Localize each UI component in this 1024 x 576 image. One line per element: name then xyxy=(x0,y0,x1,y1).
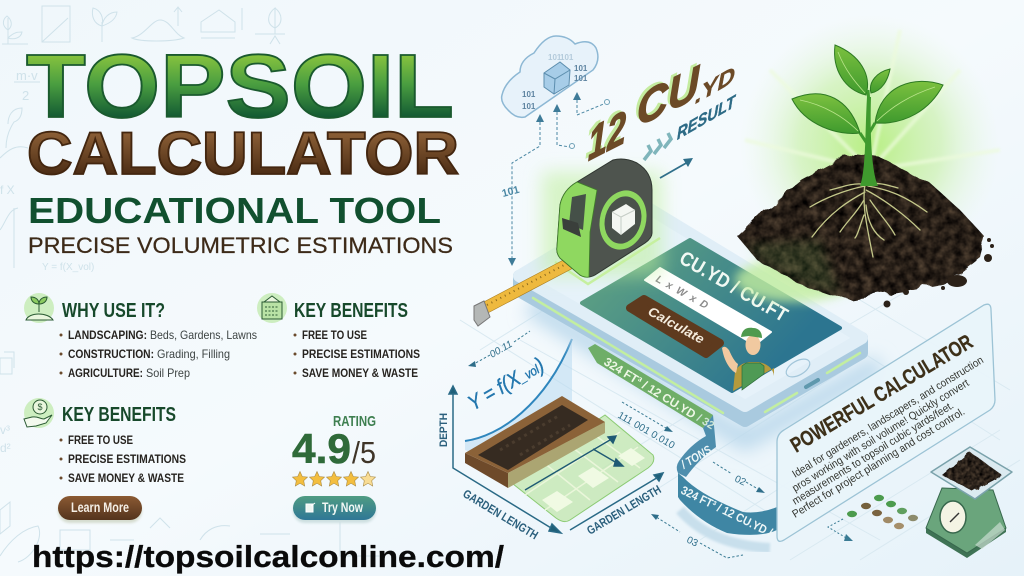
result unit: .YD xyxy=(695,61,735,110)
ribbon text faded: / 32 xyxy=(694,412,716,432)
binary digits xyxy=(522,53,588,111)
glow outline on phone xyxy=(555,238,660,284)
binary dashed annotations: 00.11 xyxy=(488,339,515,361)
background sketches: faint formulas and plants: f X xyxy=(0,183,15,197)
calculate button xyxy=(630,299,720,354)
list: PRECISE ESTIMATIONS xyxy=(68,452,186,466)
input field xyxy=(645,268,771,345)
dashed connectors from tape to cloud xyxy=(508,92,606,266)
binary dashed annotations: 02 xyxy=(733,474,748,489)
button: try now xyxy=(293,496,376,523)
connector end circles xyxy=(570,100,610,148)
formula: Y = f(X_vol) xyxy=(464,353,548,415)
rating block xyxy=(292,413,376,486)
list: Beds, Gardens, Lawns xyxy=(150,328,257,342)
button: try now: Try Now xyxy=(322,500,363,515)
isometric ground grid xyxy=(460,260,1020,560)
result readout xyxy=(585,53,736,178)
list: CONSTRUCTION: xyxy=(68,347,154,361)
list: Soil Prep xyxy=(146,366,190,380)
background sketches: faint formulas and plants xyxy=(0,6,380,562)
phone top face xyxy=(519,203,862,406)
title: TOPSOIL: TOPSOIL xyxy=(26,37,454,137)
binary dashed annotations xyxy=(472,331,763,558)
title: CALCULATOR: CALCULATOR xyxy=(27,120,459,187)
rating denominator: /5 xyxy=(352,435,376,470)
soil plant xyxy=(735,15,1000,308)
icon: hand with coin xyxy=(24,398,54,428)
phone body edge xyxy=(519,276,862,421)
soil crumbs xyxy=(884,238,994,308)
binary digits: 101 xyxy=(560,53,574,62)
phone shadow xyxy=(530,305,880,440)
depth label: DEPTH xyxy=(438,413,450,447)
result label: RESULT xyxy=(677,90,736,144)
measuring tape xyxy=(474,159,662,326)
list: FREE TO USE xyxy=(302,328,367,342)
ribbon: blue lower xyxy=(678,473,777,535)
cloud shape xyxy=(502,36,598,117)
ribbon text lower: 324 FT³ / 12 CU.YD / xyxy=(679,483,775,540)
background sketches: faint formulas and plants: 2 xyxy=(22,88,29,103)
axis arrow: garden length xyxy=(570,473,663,530)
ribbon text upper: 324 FT³ / 12 CU.YD xyxy=(601,355,699,422)
list: SAVE MONEY & WASTE xyxy=(68,471,184,485)
result number shadow: 12 xyxy=(585,99,623,169)
leaf: right xyxy=(875,81,943,123)
tagline: PRECISE VOLUMETRIC ESTIMATIONS xyxy=(28,233,453,258)
background sketches: faint formulas and plants: v³ xyxy=(0,423,10,437)
green grid plot xyxy=(508,415,654,522)
icon: sprout on soil xyxy=(24,293,54,323)
binary digits: 101 xyxy=(548,53,562,62)
worker xyxy=(722,328,774,391)
binary digits: 101 xyxy=(522,102,536,111)
panel body text: measurements to topsoil cubic yards/feet. xyxy=(790,400,956,508)
ribbon: results band xyxy=(588,344,777,548)
heading: WHY USE IT? xyxy=(62,300,165,322)
connector arrowheads xyxy=(508,92,581,266)
ribbon: green band xyxy=(588,344,713,428)
phone details: glow strips and home button xyxy=(533,298,860,413)
calculate button: Calculate xyxy=(646,304,707,347)
phone screen xyxy=(582,240,840,391)
branches xyxy=(860,90,875,145)
background sketches: faint formulas and plants: Y = f(X_vol) xyxy=(42,262,94,273)
screen heading: CU.YD / CU.FT xyxy=(676,247,791,327)
panel body text: Ideal for gardeners, landscapers, and construction xyxy=(790,354,986,481)
section: key benefits left xyxy=(24,398,186,485)
rating label: RATING xyxy=(333,413,376,430)
chevrons xyxy=(644,133,671,160)
chart: garden volume diagram xyxy=(438,339,664,542)
arrow xyxy=(660,158,693,178)
list: Grading, Filling xyxy=(157,347,230,361)
binary digits: 101 xyxy=(574,64,588,73)
title block xyxy=(26,37,459,258)
curve with shaded region xyxy=(465,339,572,470)
section: why use it xyxy=(24,293,257,380)
dots and scale group xyxy=(828,447,1012,558)
binary digits: 101 xyxy=(574,74,588,83)
label: garden length right: GARDEN LENGTH xyxy=(584,482,664,538)
icon: calculator xyxy=(257,293,287,323)
list: AGRICULTURE: xyxy=(68,366,143,380)
list xyxy=(294,328,420,380)
result CU: CU xyxy=(637,55,701,137)
icon: hand with coin: $ xyxy=(38,402,43,412)
soil mound xyxy=(738,152,985,300)
leaf: top xyxy=(835,45,868,95)
glow xyxy=(740,15,1000,275)
tape dial with cube xyxy=(593,185,653,255)
input field: L x W x D xyxy=(654,273,710,312)
list xyxy=(60,328,257,380)
section: key benefits right xyxy=(257,293,420,380)
panel body text: pros working with soil volume! Quickly convert xyxy=(790,377,971,495)
panel heading: POWERFUL CALCULATOR xyxy=(787,330,977,457)
result CU shadow: CU xyxy=(634,53,698,135)
raised garden bed xyxy=(465,396,605,488)
scale xyxy=(926,447,1012,558)
list xyxy=(60,433,186,485)
cube xyxy=(544,62,570,94)
list: LANDSCAPING: xyxy=(68,328,147,342)
leaf: small xyxy=(870,69,890,93)
heading: KEY BENEFITS xyxy=(294,300,408,322)
leaf: left xyxy=(792,94,860,133)
website url: https://topsoilcalconline.com/ xyxy=(32,539,504,574)
roots xyxy=(810,183,927,257)
list: SAVE MONEY & WASTE xyxy=(302,366,418,380)
phone calculator xyxy=(519,203,880,440)
tape blade xyxy=(478,256,577,315)
panel: powerful calculator xyxy=(777,304,995,541)
ribbon shadow xyxy=(680,510,770,548)
tape ticks xyxy=(487,262,570,305)
result number: 12 xyxy=(588,101,626,171)
depth axis xyxy=(449,386,561,533)
subtitle: educational tool: EDUCATIONAL TOOL xyxy=(28,190,441,231)
binary dashed annotations: 03 xyxy=(685,535,700,550)
dots xyxy=(847,495,918,529)
button: learn more xyxy=(58,496,142,523)
ribbon text tons: / TONS xyxy=(678,443,714,472)
list: PRECISE ESTIMATIONS xyxy=(302,347,420,361)
heading: KEY BENEFITS xyxy=(62,404,176,426)
stem xyxy=(860,97,878,186)
small annotation arrowheads xyxy=(468,361,765,520)
button: learn more: Learn More xyxy=(71,500,129,515)
leaf veins xyxy=(800,52,935,131)
binary dashed annotations: 111 001 0.010 xyxy=(616,410,677,452)
background sketches: faint formulas and plants: d² xyxy=(0,441,11,455)
soil edge glow xyxy=(735,258,855,302)
connector label: 101 xyxy=(501,184,521,200)
background sketches: faint formulas and plants: m·v xyxy=(16,68,38,83)
green tinted soil corner xyxy=(745,240,840,295)
stars xyxy=(292,472,376,486)
ribbon: blue curve xyxy=(677,415,716,477)
panel body text: Perfect for project planning and cost control. xyxy=(790,406,967,521)
label: garden length left: GARDEN LENGTH xyxy=(460,487,541,542)
cloud with data cube xyxy=(502,36,598,117)
small dashed arrow xyxy=(828,519,853,541)
tape hook xyxy=(474,301,490,326)
binary digits: 101 xyxy=(522,90,536,99)
grid arrows xyxy=(525,436,623,490)
tape glow xyxy=(542,172,662,276)
rating score: 4.9 xyxy=(292,425,351,472)
list: FREE TO USE xyxy=(68,433,133,447)
panel card xyxy=(777,304,995,541)
tape body xyxy=(557,159,652,277)
